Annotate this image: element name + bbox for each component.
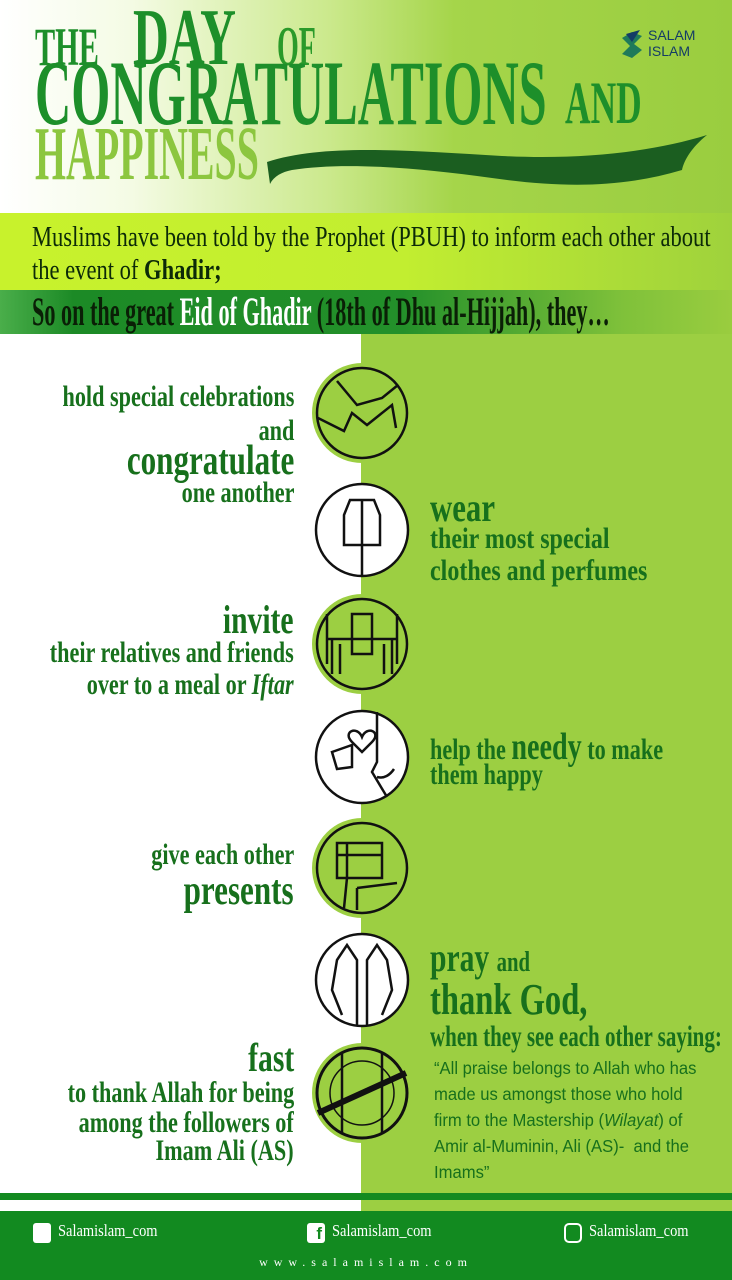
- item: wear: their most special: [430, 522, 610, 555]
- item: invite: over to a meal or Iftar: [87, 668, 294, 701]
- icon: dining table: [312, 594, 412, 694]
- title: [35, 0, 642, 196]
- quote: [434, 1058, 696, 1182]
- intro band: the event of Ghadir;: [32, 255, 222, 286]
- icon: facebook: [307, 1223, 325, 1243]
- logo: SALAM: [648, 27, 695, 43]
- eid band: So on the great Eid of Ghadir (18th of Dhu al-Hijjah), they…: [32, 289, 610, 334]
- icon: present: [312, 818, 412, 918]
- item: congratulate: congratulate: [127, 438, 294, 484]
- quote: Imams”: [434, 1162, 489, 1182]
- quote: “All praise belongs to Allah who has: [434, 1058, 696, 1078]
- logo: [622, 27, 695, 59]
- item: needy: [430, 726, 663, 791]
- header background: [0, 0, 732, 334]
- icon: youtube: [33, 1223, 51, 1243]
- footer: [0, 1211, 732, 1280]
- item: needy: them happy: [430, 758, 543, 791]
- website: www.salamislam.com: [259, 1255, 473, 1269]
- title: HAPPINESS: [35, 112, 259, 196]
- intro band: Muslims have been told by the Prophet (PBUH) to inform each other about: [32, 222, 711, 253]
- item: pray: [430, 935, 722, 1053]
- swoosh: [267, 135, 707, 185]
- title: AND: [565, 70, 642, 136]
- item: fast: among the followers of: [79, 1106, 294, 1139]
- item: needy: help the needy to make: [430, 726, 663, 768]
- footer: Salamislam_com: [332, 1221, 432, 1240]
- icon: fasting plate: [312, 1043, 412, 1143]
- right green panel: [361, 334, 732, 1212]
- item: pray: when they see each other saying:: [430, 1020, 722, 1053]
- item: invite: [50, 597, 294, 701]
- logo: ISLAM: [648, 43, 690, 59]
- title: CONGRATULATIONS: [35, 42, 547, 144]
- item: pray: pray and: [430, 935, 530, 980]
- item: wear: [430, 485, 647, 587]
- footer: Salamislam_com: [58, 1221, 158, 1240]
- quote: firm to the Mastership (Wilayat) of: [434, 1110, 682, 1130]
- item: presents: give each other: [151, 838, 294, 871]
- item: presents: [151, 838, 294, 914]
- item: congratulate: hold special celebrations: [62, 380, 294, 413]
- item: fast: [67, 1035, 294, 1167]
- item: fast: to thank Allah for being: [67, 1076, 294, 1109]
- item: wear: clothes and perfumes: [430, 554, 647, 587]
- item: presents: presents: [184, 868, 294, 914]
- item: wear: wear: [430, 485, 495, 530]
- icon circles: [312, 363, 410, 1143]
- item: invite: their relatives and friends: [50, 636, 294, 669]
- quote: made us amongst those who hold: [434, 1084, 683, 1104]
- title: THE: [35, 17, 99, 77]
- icon: facebook: f: [316, 1224, 322, 1243]
- icon: praying hands: [316, 934, 408, 1026]
- item: congratulate: [62, 380, 294, 509]
- icon: clothes: [316, 484, 408, 576]
- item: fast: fast: [248, 1035, 294, 1080]
- icon: handshake: [312, 363, 412, 463]
- title: OF: [277, 16, 316, 78]
- item: pray: thank God,: [430, 975, 587, 1024]
- item: invite: invite: [223, 597, 294, 642]
- item: congratulate: one another: [181, 476, 294, 509]
- quote: Amir al-Muminin, Ali (AS)- and the: [434, 1136, 689, 1156]
- icon: instagram: [564, 1223, 582, 1243]
- item: congratulate: and: [258, 414, 294, 447]
- footer: Salamislam_com: [589, 1221, 689, 1240]
- icon: helping hand heart: [316, 711, 408, 803]
- item: fast: Imam Ali (AS): [156, 1134, 294, 1167]
- intro band: [0, 213, 732, 290]
